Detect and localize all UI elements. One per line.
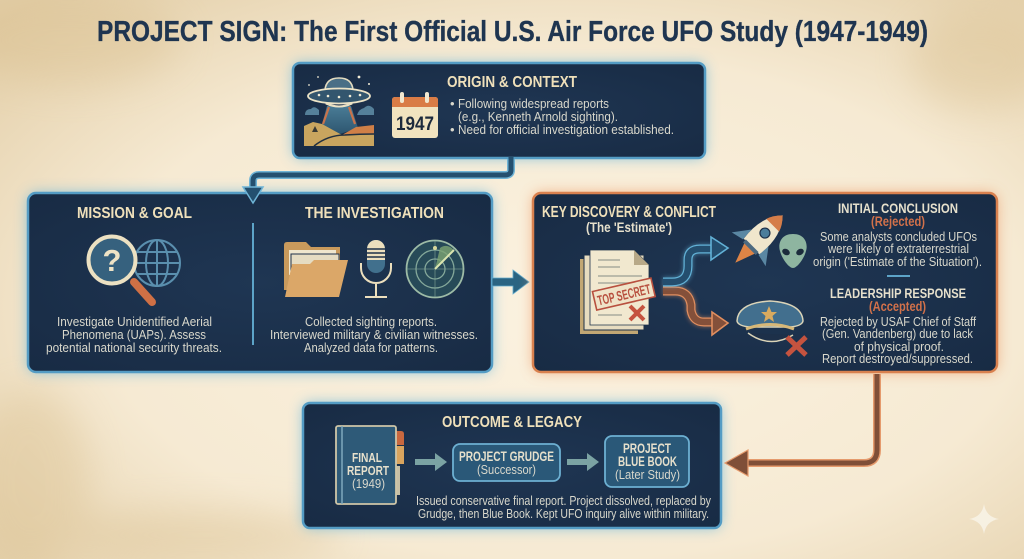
text block: origin bullets: Need for official investigation established. (458, 122, 674, 137)
icon: top secret document (580, 250, 655, 334)
text block: outcome: Issued conservative final report. Project dissolved, replaced by (416, 493, 711, 508)
box: project blue book: (Later Study) (615, 467, 680, 482)
text block: mission: potential national security threats. (46, 340, 222, 355)
text block: outcome (416, 493, 711, 521)
text block: leadership response: Report destroyed/suppressed. (822, 351, 973, 366)
text block: investigation (270, 314, 478, 355)
text block: investigation: Interviewed military & civilian witnesses. (270, 327, 478, 342)
icon: final report book: (1949) (352, 476, 385, 491)
heading: investigation: THE INVESTIGATION (305, 205, 444, 222)
icon: final report book (336, 426, 404, 504)
text block: origin bullets: Following widespread reports (458, 96, 609, 111)
panel: key discovery and conflict (533, 193, 997, 372)
arrow: orange branch (663, 291, 728, 335)
text block: initial conclusion: INITIAL CONCLUSION (838, 201, 958, 216)
heading: origin: ORIGIN & CONTEXT (447, 74, 577, 91)
arrow: blue branch (663, 237, 728, 282)
heading: outcome: OUTCOME & LEGACY (442, 414, 582, 431)
text block: investigation: Collected sighting reports. (305, 314, 437, 329)
text block: investigation: Analyzed data for patterns. (304, 340, 438, 355)
text block: leadership response: of physical proof. (854, 339, 944, 354)
text block: initial conclusion: origin ('Estimate of the Situation'). (813, 254, 982, 269)
box: project blue book (605, 436, 689, 487)
text block: initial conclusion: Some analysts concluded UFOs (820, 229, 977, 244)
text block: leadership response: (Gen. Vandenberg) due to lack (822, 326, 973, 341)
text block: mission (46, 314, 222, 355)
text block: origin bullets: • (450, 96, 455, 111)
box: project grudge: PROJECT GRUDGE (459, 449, 554, 464)
text block: leadership response: (Accepted) (869, 299, 926, 314)
box: project blue book: PROJECT (623, 441, 672, 456)
text block: mission: Investigate Unidentified Aerial (57, 314, 212, 329)
text block: leadership response: Rejected by USAF Chief of Staff (820, 314, 976, 329)
text block: outcome: Grudge, then Blue Book. Kept UFO inquiry alive within military. (418, 506, 709, 521)
text block: leadership response (820, 286, 976, 366)
icon: folder (284, 242, 348, 297)
icon: calendar 1947 (392, 92, 438, 138)
panel: origin and context (293, 63, 705, 158)
panel: mission and investigation (28, 193, 492, 372)
arrow: grudge to blue book (567, 453, 599, 471)
icon: UFO over landscape (304, 76, 374, 146)
box: project blue book: BLUE BOOK (618, 454, 677, 469)
icon: magnifier and globe: ? (103, 243, 121, 278)
arrow: report to grudge (415, 453, 447, 471)
icon: final report book: REPORT (347, 463, 389, 478)
text block: origin bullets (450, 96, 674, 137)
heading: mission: MISSION & GOAL (77, 205, 192, 222)
icon: corner sparkle (969, 504, 999, 534)
text block: origin bullets: • (450, 122, 455, 137)
text block: leadership response: LEADERSHIP RESPONSE (830, 286, 966, 301)
text block: initial conclusion (813, 201, 982, 269)
icon: officer cap with red cross (737, 301, 806, 355)
box: project grudge (453, 444, 560, 481)
icon: alien head (779, 234, 807, 268)
text block: initial conclusion: were likely of extraterrestrial (827, 241, 969, 256)
heading: key discovery: KEY DISCOVERY & CONFLICT (542, 204, 716, 221)
text block: origin bullets: (e.g., Kenneth Arnold sighting). (458, 109, 618, 124)
icon: microphone (361, 240, 391, 297)
panel: outcome and legacy (303, 403, 721, 528)
text block: initial conclusion: (Rejected) (871, 214, 925, 229)
arrow: investigation to discovery (492, 270, 529, 294)
connector arrow: origin to mission (243, 157, 511, 203)
connector arrow: discovery to outcome (725, 374, 877, 476)
text block: mission: Phenomena (UAPs). Assess (62, 327, 206, 342)
icon: top secret document: TOP SECRET (596, 281, 652, 308)
box: project grudge: (Successor) (477, 462, 536, 477)
icon: calendar 1947: 1947 (396, 113, 434, 135)
subheading: the estimate: (The 'Estimate') (586, 220, 672, 235)
icon: rocket (718, 198, 800, 280)
icon: radar (406, 240, 464, 298)
icon: final report book: FINAL (352, 450, 382, 465)
icon: magnifier and globe (88, 236, 180, 302)
